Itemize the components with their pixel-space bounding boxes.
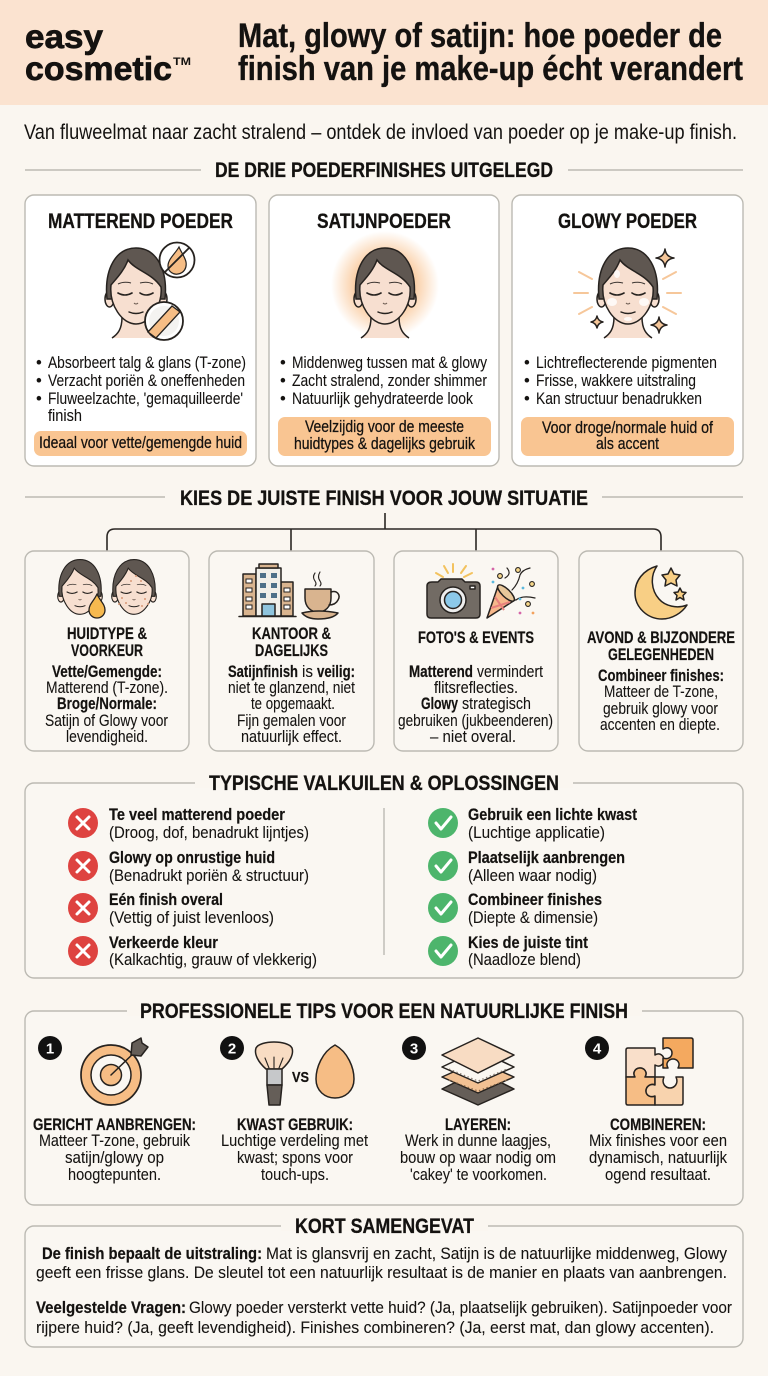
icon: cross — [68, 936, 98, 966]
text: GERICHT AANBRENGEN: — [33, 1116, 196, 1134]
panel: foto's en events — [394, 551, 558, 751]
heading: SATIJNPOEDER — [317, 209, 451, 233]
faq text: Glowy poeder versterkt vette huid? (Ja, plaatselijk gebruiken). Satijnpoeder voor — [189, 1299, 732, 1317]
tip 3 — [400, 1036, 556, 1184]
list: valkuilen: Glowy op onrustige huid — [109, 849, 275, 867]
body text: Broge/Normale: — [57, 695, 157, 713]
icon: office and coffee — [239, 564, 339, 619]
body text: natuurlijk effect. — [241, 728, 342, 746]
callout: Veelzijdig voor de meeste — [305, 418, 464, 436]
list: valkuilen: (Benadrukt poriën & structuur) — [109, 867, 309, 885]
tip 2 — [220, 1036, 368, 1184]
summary text: geeft een frisse glans. De sleutel tot een natuurlijk resultaat is de manier en plaats van aanbrengen. — [36, 1264, 727, 1282]
icon: cross — [68, 851, 98, 881]
callout — [34, 431, 247, 456]
body text: Satijnfinish — [228, 663, 298, 681]
bullet list: • — [524, 390, 530, 408]
body text: strategisch — [462, 695, 531, 713]
faq text — [36, 1299, 732, 1337]
text: 'cakey' te voorkomen. — [410, 1166, 547, 1184]
heading: HUIDTYPE & — [67, 625, 147, 643]
header band — [0, 0, 768, 105]
icon: check — [428, 808, 458, 838]
list: valkuilen — [68, 806, 317, 969]
icon: check — [428, 936, 458, 966]
tip 1 — [33, 1036, 196, 1184]
body text: Glowy — [421, 695, 458, 713]
body text: Matterend (T-zone). — [46, 679, 168, 697]
number badge: 3 — [410, 1040, 418, 1058]
list: valkuilen: (Kalkachtig, grauw of vlekkerig) — [109, 951, 317, 969]
panel: avond — [579, 551, 743, 751]
callout: Ideaal voor vette/gemengde huid — [39, 434, 242, 452]
text: Luchtige verdeling met — [221, 1132, 368, 1150]
icon: moon and stars — [635, 566, 687, 619]
bullet list: finish — [48, 407, 82, 425]
list: oplossingen: Gebruik een lichte kwast — [468, 806, 638, 824]
text: Matteer T-zone, gebruik — [39, 1132, 191, 1150]
heading: GLOWY POEDER — [558, 209, 697, 233]
bullet list: • — [280, 372, 286, 390]
bullet list: • — [36, 354, 42, 372]
text: kwast; spons voor — [237, 1149, 353, 1167]
body text: – niet overal. — [430, 728, 516, 746]
number badge: 2 — [228, 1040, 236, 1058]
bullet list: • — [36, 390, 42, 408]
text: KWAST GEBRUIK: — [237, 1116, 353, 1134]
number badge — [220, 1036, 244, 1060]
body text: Vette/Gemengde: — [52, 663, 162, 681]
panel: glowy poeder — [512, 195, 743, 466]
list: oplossingen: (Luchtige applicatie) — [468, 824, 605, 842]
heading: DAGELIJKS — [255, 642, 328, 660]
body text: Matterend — [409, 663, 473, 681]
bullet list: • — [280, 354, 286, 372]
bullet list — [524, 354, 717, 408]
logo: cosmetic — [25, 50, 172, 87]
heading — [587, 629, 735, 664]
callout — [521, 417, 734, 456]
body text: Fijn gemalen voor — [237, 712, 346, 730]
number badge — [585, 1036, 609, 1060]
body text: gebruiken (jukbeenderen) — [398, 712, 553, 730]
bullet list: • — [524, 372, 530, 390]
bullet list: Kan structuur benadrukken — [536, 390, 702, 408]
list: valkuilen: (Vettig of juist levenloos) — [109, 909, 274, 927]
icon: layers — [442, 1038, 514, 1105]
heading: FOTO'S & EVENTS — [418, 629, 534, 647]
bullet list: Absorbeert talg & glans (T-zone) — [48, 354, 246, 372]
text: Werk in dunne laagjes, — [405, 1132, 551, 1150]
bullet list: Middenweg tussen mat & glowy — [292, 354, 488, 372]
callout: als accent — [596, 435, 659, 453]
icon: brush vs sponge — [255, 1042, 354, 1105]
text — [589, 1116, 728, 1184]
bullet list: Frisse, wakkere uitstraling — [536, 372, 696, 390]
list: oplossingen: Plaatselijk aanbrengen — [468, 849, 625, 867]
body text — [45, 663, 168, 746]
logo — [25, 18, 191, 87]
panel: professionele tips — [25, 999, 743, 1205]
faq text: rijpere huid? (Ja, geeft levendigheid). Finishes combineren? (Ja, eerst mat, dan glowy accenten). — [36, 1319, 714, 1337]
bullet list: Verzacht poriën & oneffenheden — [48, 372, 245, 390]
body text: vermindert — [477, 663, 543, 681]
list: valkuilen: Eén finish overal — [109, 891, 223, 909]
icon: brush vs sponge: VS — [292, 1069, 309, 1086]
body text: levendigheid. — [66, 728, 148, 746]
body text: gebruik glowy voor — [603, 700, 718, 718]
body text: veilig: — [317, 663, 355, 681]
text: hoogtepunten. — [68, 1166, 161, 1184]
section heading: situation: KIES DE JUISTE FINISH VOOR JOUW SITUATIE — [180, 486, 588, 510]
text: dynamisch, natuurlijk — [589, 1149, 728, 1167]
number badge — [38, 1036, 62, 1060]
heading: TYPISCHE VALKUILEN & OPLOSSINGEN — [209, 771, 559, 795]
heading — [252, 625, 331, 660]
connector tree — [107, 513, 661, 551]
callout: huidtypes & dagelijks gebruik — [294, 435, 476, 453]
text: LAYEREN: — [445, 1116, 511, 1134]
title — [238, 17, 743, 88]
list: oplossingen: (Diepte & dimensie) — [468, 909, 598, 927]
number badge: 1 — [46, 1040, 54, 1058]
text — [33, 1116, 196, 1184]
number badge: 4 — [593, 1040, 602, 1058]
text — [400, 1116, 556, 1184]
tip 4 — [585, 1036, 728, 1184]
body text — [398, 663, 553, 746]
heading: MATTEREND POEDER — [48, 209, 233, 233]
summary text — [36, 1245, 728, 1282]
icon: check — [428, 851, 458, 881]
heading: AVOND & BIJZONDERE — [587, 629, 735, 647]
logo: TM — [173, 56, 191, 68]
heading: KANTOOR & — [252, 625, 331, 643]
panel: valkuilen en oplossingen — [25, 771, 743, 978]
list: valkuilen: Te veel matterend poeder — [109, 806, 286, 824]
icon: check — [428, 893, 458, 923]
summary text: De finish bepaalt de uitstraling: — [42, 1245, 262, 1263]
bullet list: • — [280, 390, 286, 408]
list: oplossingen: (Naadloze blend) — [468, 951, 581, 969]
bullet list: Natuurlijk gehydrateerde look — [292, 390, 474, 408]
icon: target with dart — [81, 1038, 148, 1105]
icon: puzzle — [626, 1038, 693, 1105]
icon: cross — [68, 893, 98, 923]
heading: VOORKEUR — [71, 642, 143, 660]
body text: niet te glanzend, niet — [228, 679, 355, 697]
bullet list: • — [524, 354, 530, 372]
icon: glowy face with sparkles — [574, 248, 681, 338]
list: oplossingen: (Alleen waar nodig) — [468, 867, 597, 885]
text: bouw op waar nodig om — [400, 1149, 556, 1167]
panel: matterend poeder — [25, 195, 256, 466]
panel: satijnpoeder — [269, 195, 499, 466]
icon: matte face with badges — [105, 242, 194, 340]
bullet list: Lichtreflecterende pigmenten — [536, 354, 717, 372]
list: valkuilen: Verkeerde kleur — [109, 934, 219, 952]
icon: two faces — [58, 560, 156, 618]
list: valkuilen: (Droog, dof, benadrukt lijntjes) — [109, 824, 309, 842]
heading: KORT SAMENGEVAT — [295, 1214, 474, 1238]
panel: kort samengevat — [25, 1214, 743, 1347]
section heading: finishes: DE DRIE POEDERFINISHES UITGELEGD — [215, 158, 553, 182]
heading: PROFESSIONELE TIPS VOOR EEN NATUURLIJKE FINISH — [140, 999, 628, 1023]
bullet list: Zacht stralend, zonder shimmer — [292, 372, 487, 390]
text — [221, 1116, 368, 1184]
callout: Voor droge/normale huid of — [542, 419, 713, 437]
summary text: Mat is glansvrij en zacht, Satijn is de natuurlijke middenweg, Glowy — [266, 1245, 728, 1263]
icon: camera and party popper — [427, 564, 535, 618]
text: COMBINEREN: — [610, 1116, 706, 1134]
text: satijn/glowy op — [65, 1149, 164, 1167]
body text — [598, 667, 724, 734]
number badge — [402, 1036, 426, 1060]
callout — [278, 417, 491, 456]
bullet list — [36, 354, 246, 425]
body text: Combineer finishes: — [598, 667, 724, 685]
bullet list: Fluweelzachte, 'gemaquilleerde' — [48, 390, 243, 408]
list: oplossingen — [428, 806, 638, 969]
body text: Matteer de T-zone, — [604, 683, 718, 701]
body text: accenten en diepte. — [600, 716, 720, 734]
bullet list: • — [36, 372, 42, 390]
body text — [228, 663, 355, 746]
body text: flitsreflecties. — [434, 679, 518, 697]
heading — [67, 625, 147, 660]
icon: satin face with glow — [331, 231, 439, 339]
heading: GELEGENHEDEN — [608, 646, 714, 664]
faq text: Veelgestelde Vragen: — [36, 1299, 186, 1317]
list: oplossingen: Combineer finishes — [468, 891, 602, 909]
body text: te opgemaakt. — [251, 695, 335, 713]
panel: huidtype — [25, 551, 189, 751]
panel: kantoor — [209, 551, 374, 751]
text: touch-ups. — [261, 1166, 329, 1184]
text: ogend resultaat. — [605, 1166, 711, 1184]
list: oplossingen: Kies de juiste tint — [468, 934, 589, 952]
body text: Satijn of Glowy voor — [45, 712, 168, 730]
icon: cross — [68, 808, 98, 838]
body text: is — [302, 663, 313, 681]
logo: easy — [25, 18, 104, 55]
text: Mix finishes voor een — [589, 1132, 727, 1150]
bullet list — [280, 354, 488, 408]
